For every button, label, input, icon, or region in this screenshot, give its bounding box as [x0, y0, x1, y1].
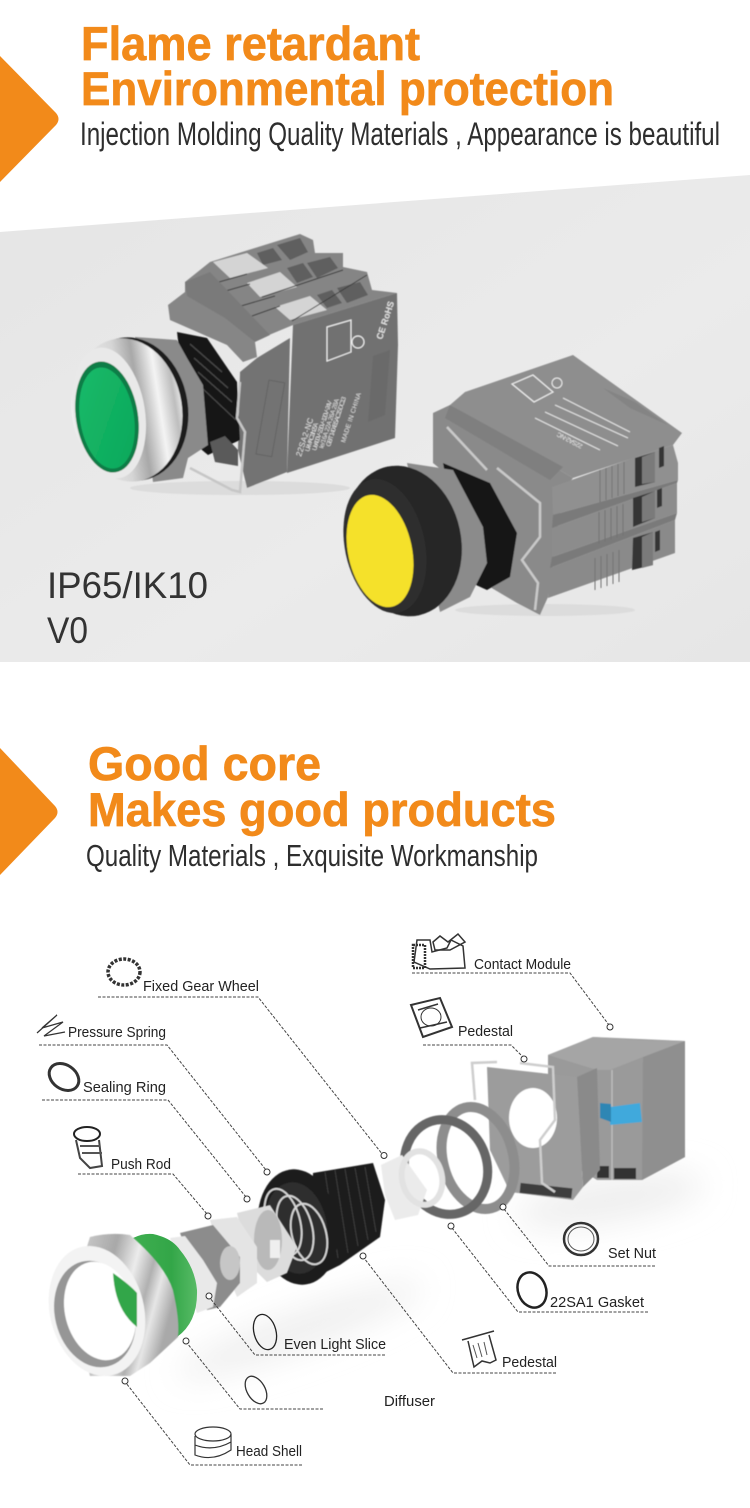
- callout: Pressure Spring: [37, 1015, 270, 1175]
- callout: Fixed Gear Wheel: Fixed Gear Wheel: [143, 978, 259, 995]
- terminal rows: [185, 234, 397, 345]
- chrome bezel: [61, 330, 193, 490]
- callout: Pedestal lower: Pedestal: [502, 1354, 557, 1371]
- exploded: gaskets and gear rings: [381, 1099, 525, 1225]
- clip wire: [447, 427, 540, 610]
- callout: Even Light Slice: Even Light Slice: [284, 1336, 386, 1353]
- callout: 22SA1 Gasket: [448, 1223, 648, 1312]
- section 2 heading: Makes good products: [88, 783, 556, 836]
- exploded: chrome head shell: [35, 1234, 178, 1386]
- label face: [287, 293, 398, 473]
- face markings: Ue/400V~230V~120V~24V: [311, 399, 334, 452]
- face markings: [294, 300, 396, 458]
- callout: Pedestal lower: [360, 1253, 557, 1373]
- callout: Diffuser: [183, 1338, 435, 1410]
- callout: Set Nut: Set Nut: [608, 1245, 657, 1262]
- exploded: white push rod: [170, 1205, 297, 1313]
- exploded: pedestal frame: [472, 1062, 600, 1200]
- callout: Pedestal upper: Pedestal: [458, 1023, 513, 1040]
- face markings: CE RoHS: [374, 300, 396, 341]
- face markings: MADE IN CHINA: [340, 391, 363, 444]
- section 1 arrow marker: [0, 56, 58, 182]
- callout: Sealing Ring: [42, 1058, 250, 1202]
- callout: Pressure Spring: Pressure Spring: [68, 1024, 166, 1041]
- face markings: Ie/16A 22A 26A 28A: [318, 397, 341, 450]
- section 1 heading: Flame retardant: [81, 17, 420, 70]
- section 2 heading: Good core: [88, 737, 321, 790]
- callout: Contact Module: Contact Module: [474, 956, 571, 973]
- callout: Set Nut: [500, 1204, 657, 1266]
- callout: Pedestal upper: [411, 998, 527, 1062]
- thread: [443, 463, 517, 590]
- section 1 heading: Environmental protection: [81, 62, 614, 115]
- face markings: UkMAC1 Ith:25A: [304, 421, 320, 453]
- green lens: [68, 357, 146, 477]
- callout: Head Shell: Head Shell: [236, 1443, 302, 1460]
- exploded: black base with spring: [250, 1163, 385, 1290]
- front shoulder: [168, 292, 257, 362]
- callout: Fixed Gear Wheel: [98, 959, 387, 1158]
- yellow cap: [337, 489, 423, 613]
- section 2 heading: [88, 737, 556, 836]
- thread: [177, 332, 240, 455]
- callout: Head Shell: [122, 1378, 302, 1465]
- callout: Diffuser: Diffuser: [384, 1393, 435, 1410]
- callout: Contact Module: [412, 934, 613, 1030]
- callout: Sealing Ring: Sealing Ring: [83, 1079, 166, 1096]
- section 1 heading: [81, 17, 614, 115]
- terminals: [552, 445, 678, 515]
- hex nut: [135, 337, 208, 482]
- side panel: [433, 405, 573, 615]
- callout: Push Rod: [74, 1127, 211, 1219]
- photo: yellow push button switch: [330, 355, 682, 627]
- black bezel: [330, 455, 476, 627]
- photo background: [0, 175, 750, 662]
- photo: yellow push button switch: 22SA2-NC: [556, 430, 584, 449]
- gray nut: [407, 463, 487, 612]
- exploded view shadow: [172, 1162, 707, 1391]
- callout: 22SA1 Gasket: 22SA1 Gasket: [550, 1294, 645, 1311]
- spec text: V0: [47, 610, 88, 651]
- face markings: GB/T 14048.5 AC15 DC13: [325, 396, 348, 448]
- callout: Push Rod: Push Rod: [111, 1156, 171, 1173]
- spec text: [47, 565, 208, 651]
- top label face: [450, 355, 682, 478]
- spec text: IP65/IK10: [47, 565, 208, 606]
- section 2 subtitle: Quality Materials , Exquisite Workmanship: [86, 838, 538, 873]
- exploded: contact module: [548, 1037, 685, 1180]
- black ring: [65, 329, 199, 489]
- exploded: green lens: [133, 1234, 197, 1337]
- photo: green push button switch: [61, 234, 398, 495]
- lower clip block: [210, 436, 238, 466]
- section 2 arrow marker: [0, 748, 58, 875]
- face markings: 22SA2-NC: [294, 417, 315, 458]
- callout: Even Light Slice: [206, 1293, 386, 1355]
- side panel: [238, 338, 290, 488]
- label markings: [512, 375, 553, 402]
